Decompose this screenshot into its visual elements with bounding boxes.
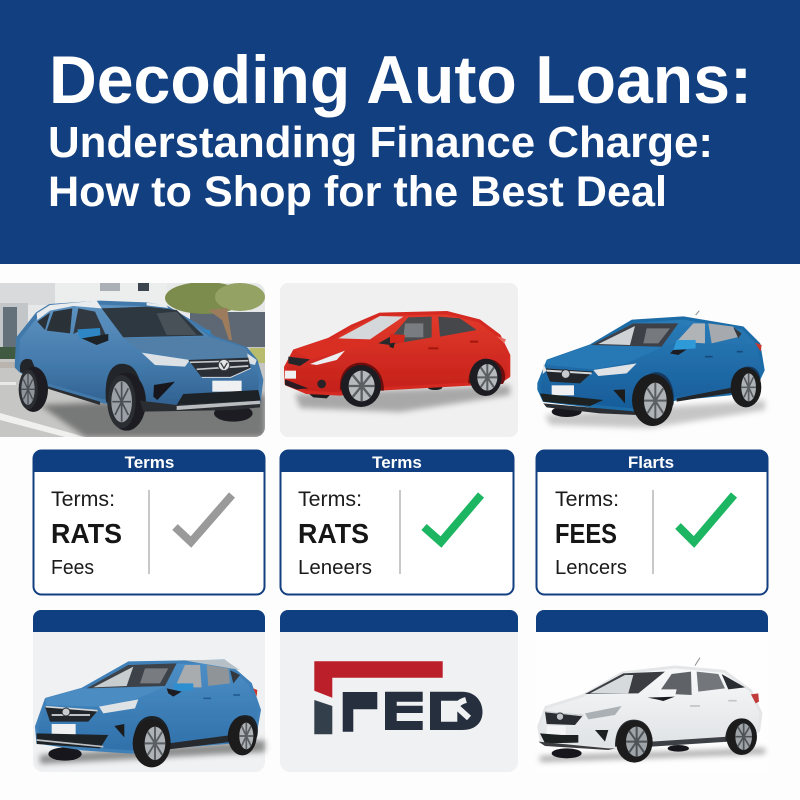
card 2 header label: Terms	[372, 453, 422, 472]
car: red hatchback	[285, 313, 509, 407]
card 3 line 3: Lencers	[555, 557, 627, 579]
card 2 line 2: RATS	[298, 518, 369, 549]
car: blue hatchback	[539, 311, 763, 426]
card 3 line 1: Terms:	[555, 488, 619, 511]
logo: FEDS letterforms	[314, 692, 482, 734]
header banner	[0, 0, 800, 264]
card 2: terms green check	[280, 450, 514, 594]
car: blue crossover	[37, 660, 259, 767]
bottom panel 3: white hatchback	[536, 610, 768, 772]
car: blue SUV	[17, 301, 261, 431]
panel: blue hatchback	[539, 311, 765, 428]
card 1 line 2: RATS	[51, 518, 122, 549]
title: Decoding Auto Loans:	[49, 42, 752, 118]
logo: red bracket	[314, 661, 443, 698]
car: white hatchback	[538, 658, 761, 763]
bottom panel 2: FEDS logo card	[280, 610, 518, 772]
card 1 line 1: Terms:	[51, 488, 115, 511]
photo panel: blue SUV in parking lot	[0, 282, 265, 437]
subtitle line 2: How to Shop for the Best Deal	[48, 168, 667, 216]
icon: green check mark	[678, 495, 734, 542]
bottom panel 1: blue crossover	[33, 610, 265, 772]
icon: green check mark	[424, 495, 481, 542]
subtitle line 1: Understanding Finance Charge:	[48, 118, 713, 167]
card 2 line 1: Terms:	[298, 488, 362, 511]
card 3 header label: Flarts	[628, 453, 674, 472]
icon: grey check mark	[175, 495, 232, 542]
card 1 line 3: Fees	[51, 557, 94, 579]
card 3 line 2: FEES	[555, 518, 617, 549]
card 3: flarts green check	[536, 450, 768, 594]
panel: red car	[280, 283, 518, 437]
card 1 header label: Terms	[125, 453, 174, 472]
card 2 line 3: Leneers	[298, 557, 372, 579]
card 1: terms grey check	[33, 450, 265, 594]
